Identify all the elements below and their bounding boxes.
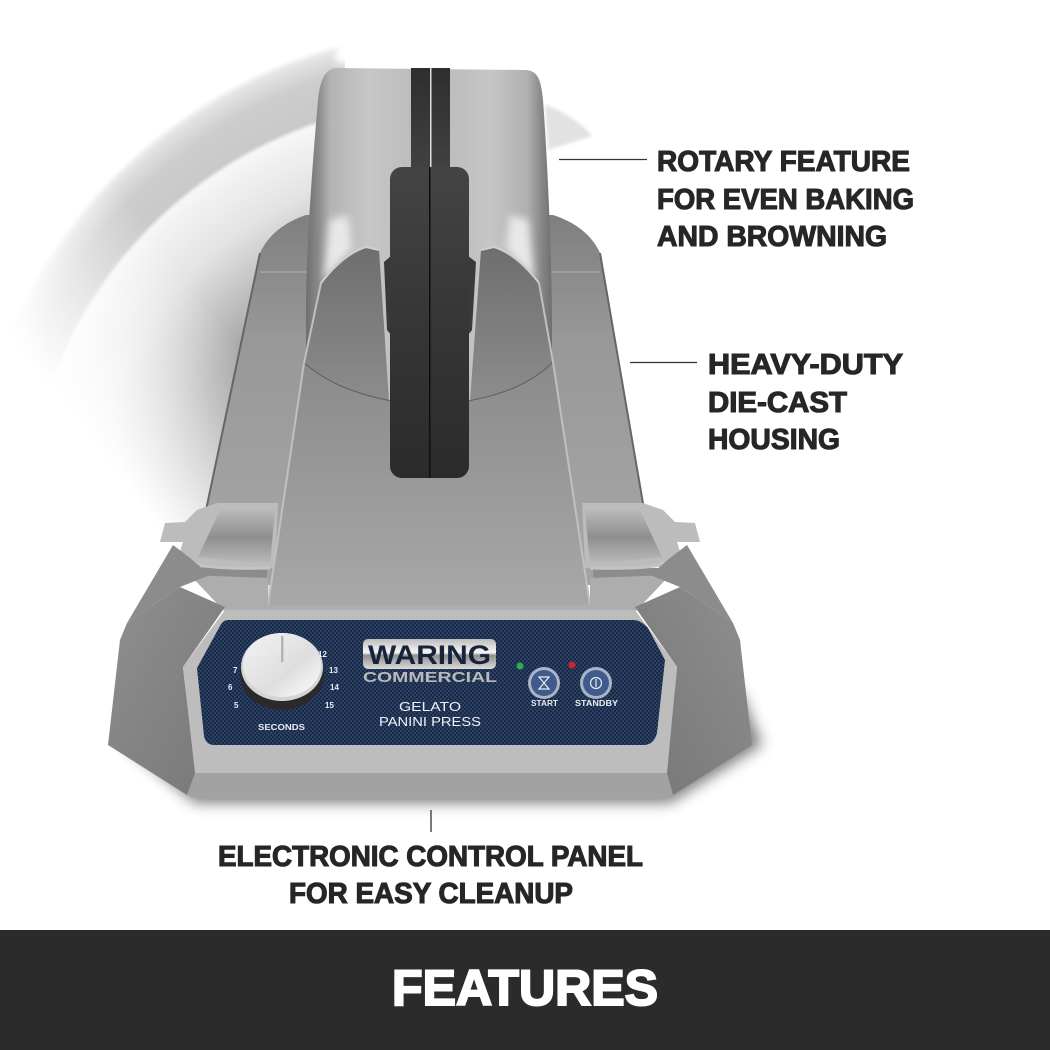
callout: die-cast housing: HEAVY-DUTY bbox=[708, 349, 903, 381]
callout: die-cast housing bbox=[630, 349, 903, 456]
callout: rotary feature: AND BROWNING bbox=[657, 221, 887, 253]
top slivers bbox=[127, 545, 210, 623]
faint blur right of drum bbox=[545, 105, 592, 150]
timer scale: 13 bbox=[329, 666, 338, 675]
timer scale: 15 bbox=[325, 701, 334, 710]
rotating drum bbox=[306, 68, 552, 440]
bottom strip bbox=[187, 773, 673, 798]
soft end of blur above drum bbox=[334, 25, 430, 64]
black handle bbox=[390, 167, 469, 478]
hinge shadows beside handle bbox=[384, 256, 476, 335]
callout: control panel: FOR EASY CLEANUP bbox=[289, 878, 573, 910]
Waring Commercial logo: WARING bbox=[368, 640, 491, 670]
timer scale: SECONDS bbox=[258, 723, 306, 732]
Waring Commercial logo bbox=[363, 639, 497, 686]
timer scale: 7 bbox=[233, 666, 238, 675]
base shadow bbox=[125, 690, 762, 803]
start button bbox=[528, 667, 560, 708]
callout: rotary feature bbox=[559, 146, 914, 253]
drum highlights bbox=[324, 215, 534, 280]
timer knob bbox=[240, 633, 324, 710]
deck bbox=[190, 575, 670, 612]
footer band: features bbox=[0, 930, 1050, 1050]
footer band: features: FEATURES bbox=[392, 960, 658, 1016]
corner facets bbox=[108, 587, 225, 795]
callout: die-cast housing: DIE-CAST bbox=[708, 387, 847, 419]
callout: rotary feature: FOR EVEN BAKING bbox=[657, 184, 914, 216]
timer scale: 14 bbox=[330, 683, 339, 692]
timer scale bbox=[228, 650, 339, 732]
standby button bbox=[575, 667, 619, 708]
product name bbox=[379, 699, 481, 729]
control panel bbox=[197, 620, 665, 745]
product: panini press illustration bbox=[38, 48, 769, 813]
indicator lights bbox=[516, 662, 576, 670]
callout: die-cast housing: HOUSING bbox=[708, 424, 840, 456]
front housing bbox=[268, 247, 590, 605]
base bbox=[108, 545, 752, 798]
callout: control panel bbox=[218, 810, 643, 910]
rear housing bbox=[200, 215, 650, 585]
Waring Commercial logo: COMMERCIAL bbox=[363, 669, 497, 686]
callout: control panel: ELECTRONIC CONTROL PANEL bbox=[218, 841, 643, 873]
start button: START bbox=[531, 699, 558, 708]
left drip tray bbox=[160, 503, 278, 582]
product name: GELATO bbox=[399, 699, 461, 714]
drum centre stripe bbox=[411, 68, 450, 170]
timer scale: 5 bbox=[234, 701, 239, 710]
product name: PANINI PRESS bbox=[379, 714, 481, 729]
front frame bbox=[183, 610, 677, 773]
callout: rotary feature: ROTARY FEATURE bbox=[657, 146, 910, 178]
timer scale: 12 bbox=[318, 650, 327, 659]
right drip tray bbox=[582, 503, 700, 582]
rotary motion blur bbox=[38, 48, 345, 597]
standby button: STANDBY bbox=[575, 699, 619, 708]
timer scale: 6 bbox=[228, 683, 233, 692]
